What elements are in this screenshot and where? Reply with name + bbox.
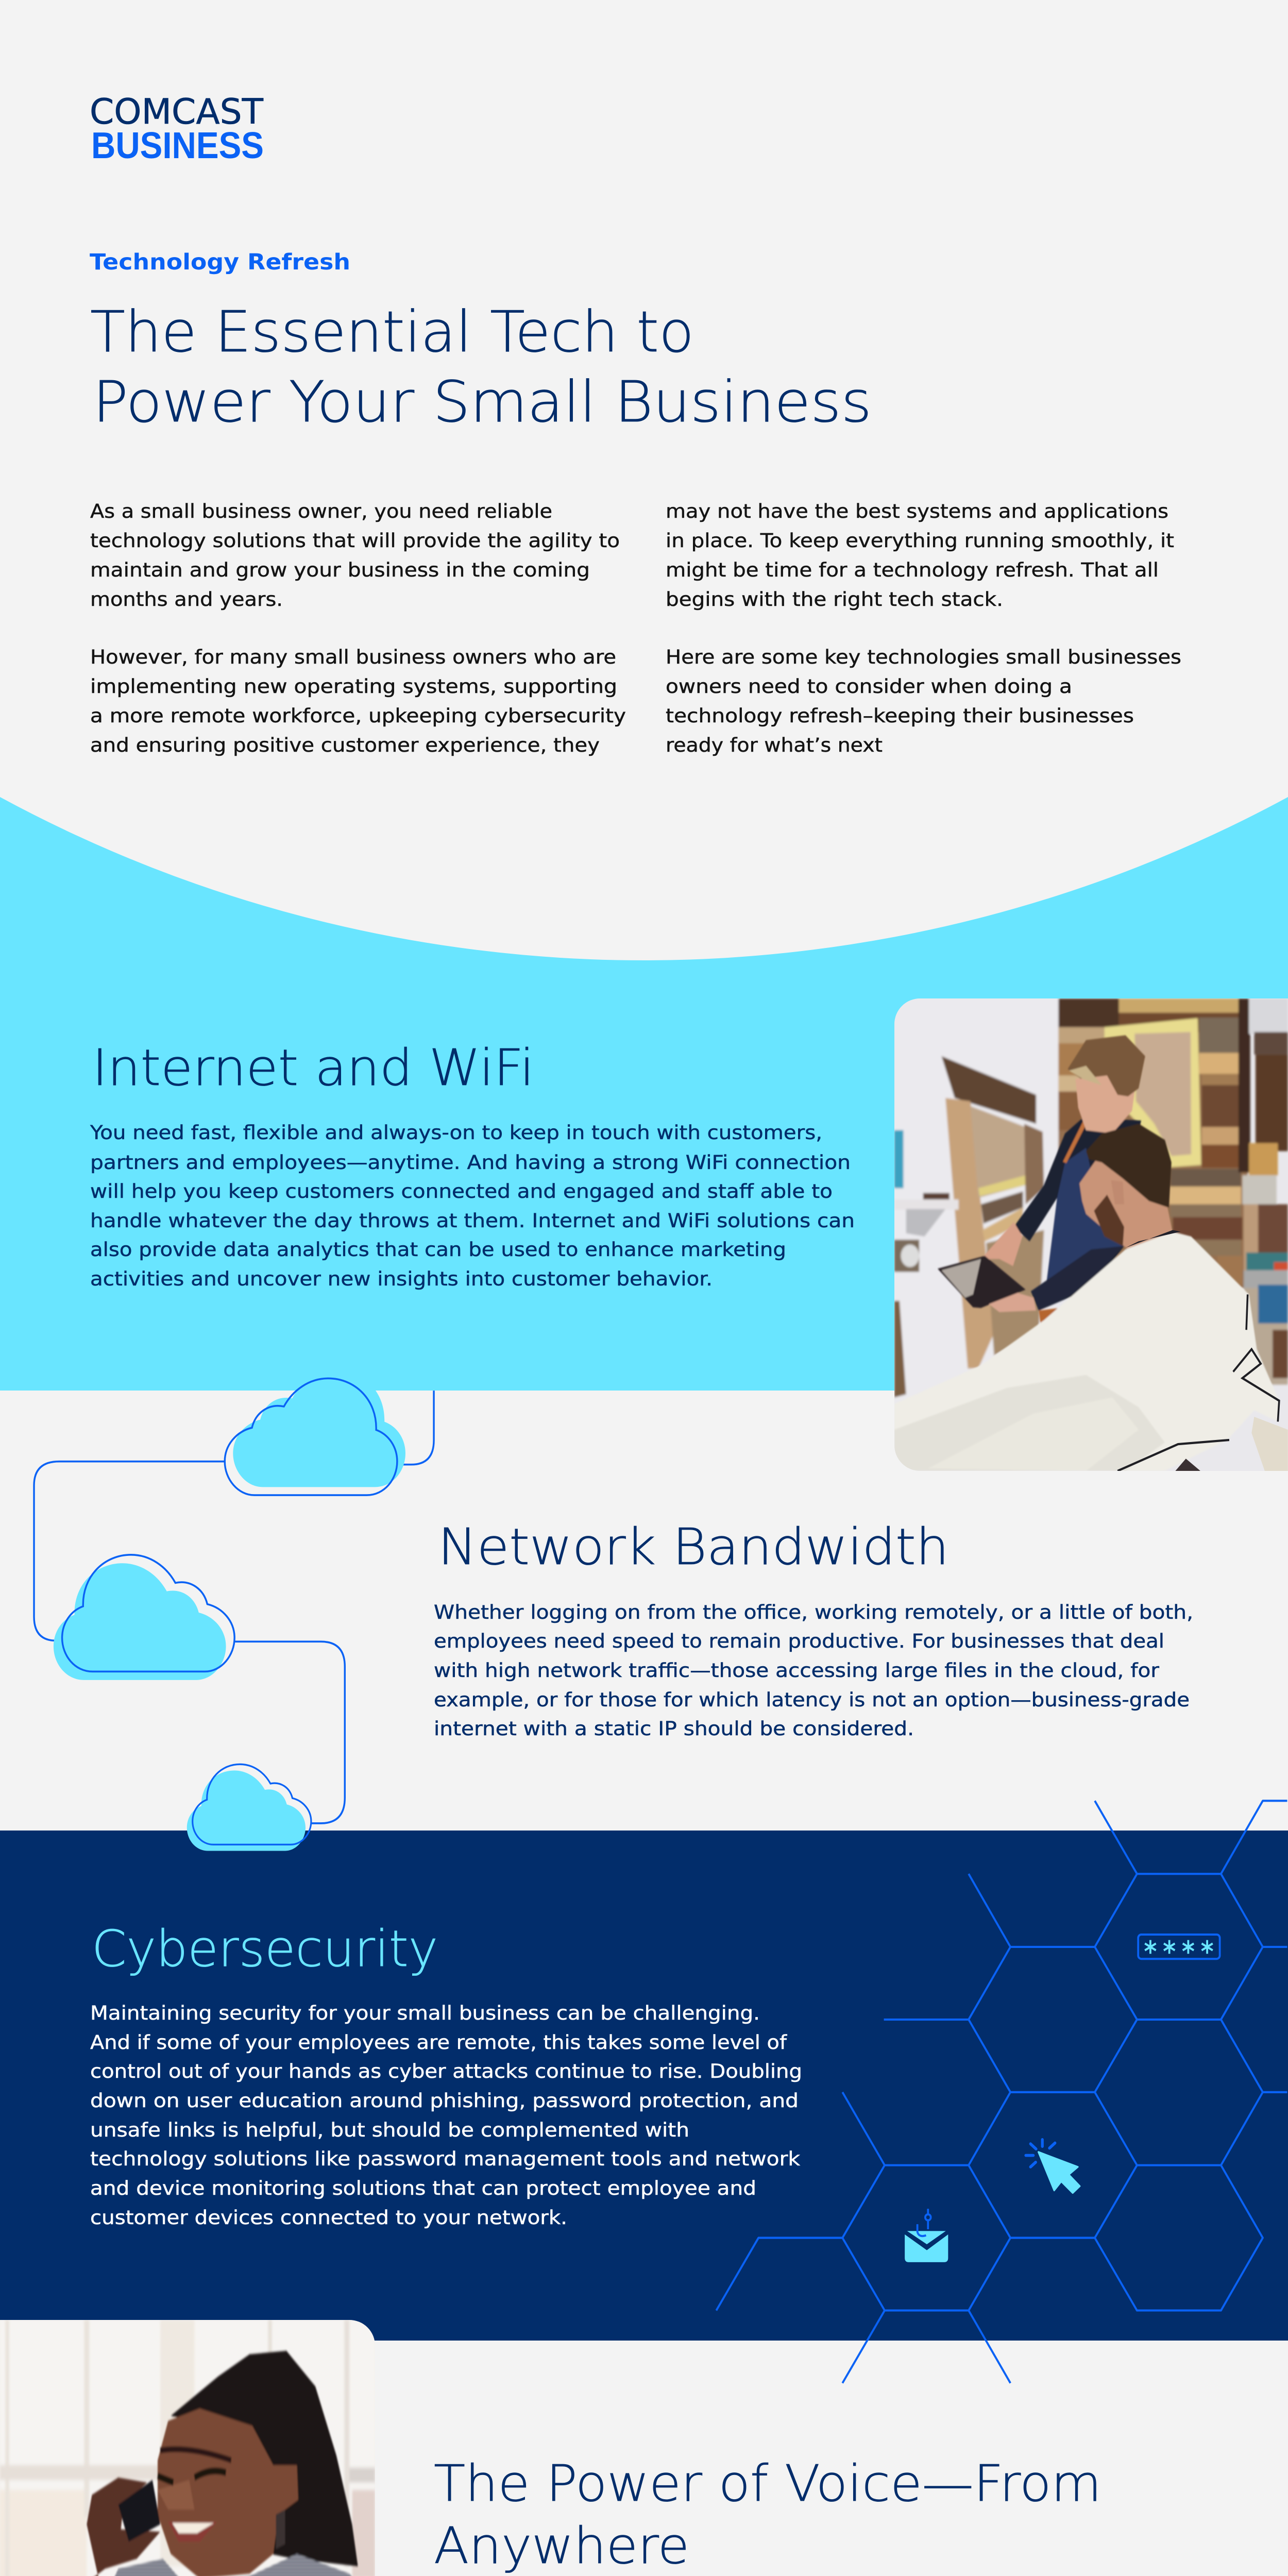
dress [114, 2552, 352, 2576]
text: Cybersecurity: And if some of your employees are remote, this takes some level of [90, 2031, 787, 2054]
arm and hand [17, 2478, 160, 2576]
text: Cybersecurity: technology solutions like password management tools and network [90, 2148, 801, 2170]
intro text: left column: a more remote workforce, upkeeping cybersecurity [90, 705, 626, 727]
intro text: right column [666, 500, 1181, 756]
title: Power Your Small Business [93, 369, 872, 435]
seated client [1079, 1159, 1173, 1249]
intro text: left column: implementing new operating systems, supporting [90, 675, 617, 698]
text: Internet and WiFi: will help you keep customers connected and engaged and staff able to [90, 1180, 833, 1202]
intro text: left column: maintain and grow your business in the coming [90, 559, 590, 581]
intro text: right column: Here are some key technologies small businesses [666, 646, 1181, 668]
intro text: left column: However, for many small business owners who are [90, 646, 616, 668]
intro text: left column: technology solutions that will provide the agility to [90, 530, 620, 552]
hair [171, 2351, 358, 2566]
cape [894, 1232, 1279, 1471]
panel: network bandwidth connector lines [34, 1391, 434, 1823]
logo: Comcast Business [90, 92, 264, 166]
icon: phishing email [905, 2209, 948, 2262]
text: Network Bandwidth: with high network traffic—those accessing large files in the cloud, for [434, 1659, 1160, 1682]
intro text: right column: may not have the best systems and applications [666, 500, 1168, 522]
title [90, 299, 872, 435]
intro text: right column: begins with the right tech stack. [666, 588, 1003, 611]
heading: The Power of Voice—From Anywhere [434, 2454, 1101, 2575]
text: Internet and WiFi [90, 1122, 855, 1290]
panel: internet and wifi cyan background with curve [0, 797, 1288, 1391]
text: Cybersecurity: customer devices connected to your network. [90, 2207, 567, 2229]
intro text: left column: As a small business owner, you need reliable [90, 500, 552, 522]
text: Cybersecurity: unsafe links is helpful, but should be complemented with [90, 2119, 689, 2141]
eyebrow: Technology Refresh: Technology Refresh [90, 249, 350, 275]
text: Internet and WiFi: handle whatever the day throws at them. Internet and WiFi solutions can [90, 1210, 855, 1232]
text: Cybersecurity: control out of your hands as cyber attacks continue to rise. Doubling [90, 2060, 802, 2082]
icon: three clouds [54, 1370, 405, 1851]
text: Network Bandwidth: Whether logging on from the office, working remotely, or a little of both, [434, 1601, 1193, 1623]
intro text: right column: technology refresh–keeping their businesses [666, 705, 1134, 727]
text: Cybersecurity: and device monitoring solutions that can protect employee and [90, 2177, 756, 2199]
icon: clicking cursor [1026, 2140, 1080, 2193]
heading: The Power of Voice—From Anywhere: The Power of Voice—From [434, 2454, 1101, 2513]
text: Cybersecurity [90, 2002, 802, 2229]
text: Internet and WiFi: You need fast, flexible and always-on to keep in touch with customers, [90, 1122, 822, 1144]
intro text: right column: ready for what’s next [666, 734, 883, 756]
text: Internet and WiFi: partners and employees—anytime. And having a strong WiFi connection [90, 1151, 851, 1174]
icon: middle cloud [54, 1555, 234, 1680]
text: Cybersecurity: down on user education around phishing, password protection, and [90, 2090, 799, 2112]
photo: barber showing tablet to client [894, 998, 1288, 1471]
icon: top cloud [225, 1370, 405, 1495]
photo: woman on a phone call [0, 2320, 375, 2576]
heading: The Power of Voice—From Anywhere: Anywhere [434, 2517, 689, 2575]
text: Network Bandwidth: example, or for those for which latency is not an option—business-grade [434, 1689, 1190, 1711]
icon: password field [1138, 1935, 1220, 1959]
text: Network Bandwidth [434, 1601, 1193, 1740]
heading: Cybersecurity: Cybersecurity [92, 1920, 438, 1978]
logo: Comcast Business: BUSINESS [91, 125, 264, 166]
text: Internet and WiFi: also provide data analytics that can be used to enhance marketing [90, 1239, 786, 1261]
heading: Internet and WiFi: Internet and WiFi [92, 1039, 534, 1097]
title: The Essential Tech to [90, 299, 694, 365]
chart: hexagon security grid [716, 1801, 1287, 2383]
text: Network Bandwidth: employees need speed to remain productive. For businesses that deal [434, 1630, 1164, 1652]
standing barber [1014, 1117, 1141, 1311]
panel: cybersecurity navy background [0, 1831, 1288, 2341]
text: Network Bandwidth: internet with a static IP should be considered. [434, 1718, 914, 1740]
icon: bottom cloud [187, 1764, 311, 1851]
face [158, 2409, 298, 2576]
logo: Comcast Business: COMCAST [90, 92, 263, 132]
intro text: right column: owners need to consider when doing a [666, 675, 1072, 698]
text: Internet and WiFi: activities and uncover new insights into customer behavior. [90, 1268, 713, 1290]
intro text: left column: and ensuring positive customer experience, they [90, 734, 600, 756]
heading: Network Bandwidth: Network Bandwidth [438, 1518, 949, 1576]
intro text: right column: might be time for a technology refresh. That all [666, 559, 1159, 581]
text: Cybersecurity: Maintaining security for your small business can be challenging. [90, 2002, 760, 2024]
intro text: left column [90, 500, 626, 756]
intro text: left column: months and years. [90, 588, 283, 611]
intro text: right column: in place. To keep everything running smoothly, it [666, 530, 1174, 552]
